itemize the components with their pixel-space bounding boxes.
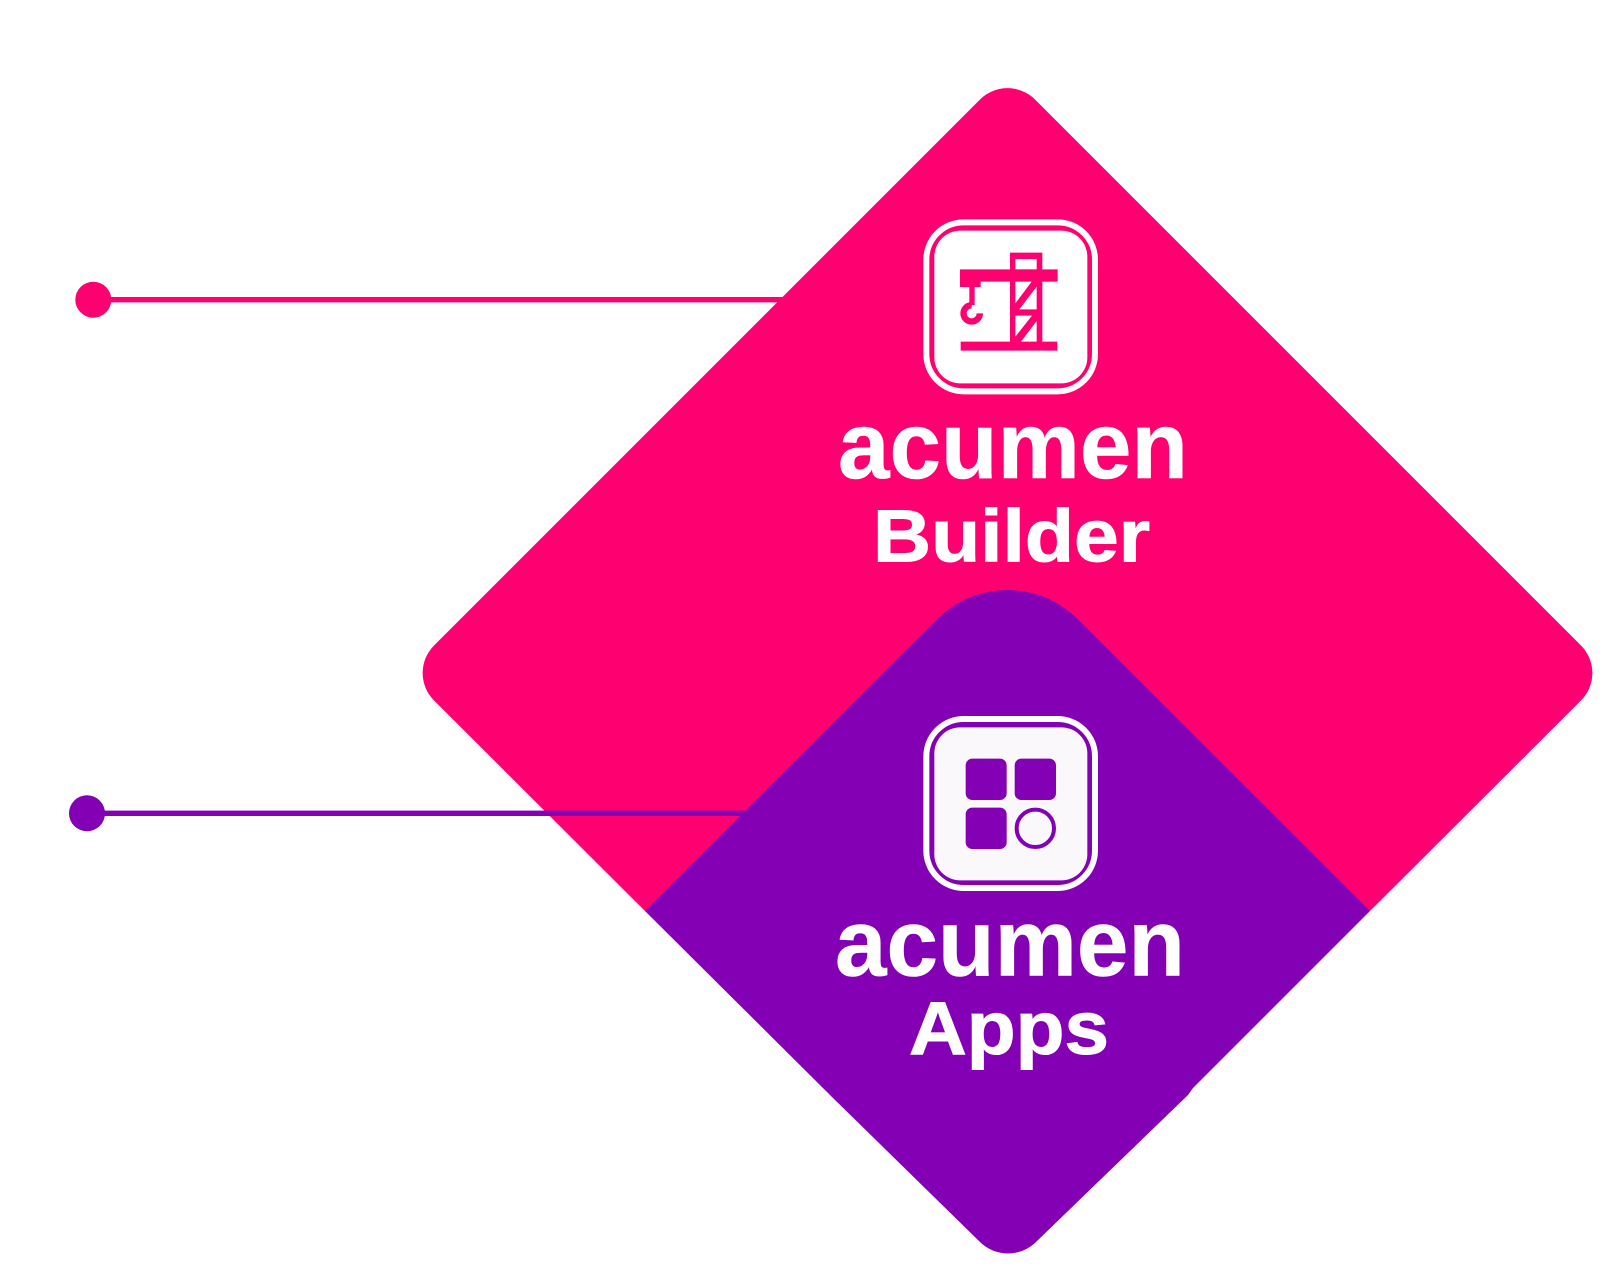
heading: Apps: Apps: [909, 986, 1109, 1070]
panel: pink diamond: [423, 88, 1592, 911]
logo text: acumen: acumen: [835, 891, 1185, 997]
connector: purple dot and line: [69, 795, 749, 831]
connector: pink dot and line: [75, 282, 788, 318]
heading: Builder: Builder: [873, 495, 1150, 578]
panel: purple rounded shape: [645, 590, 1370, 1253]
logo text: acumen: acumen: [838, 393, 1188, 499]
icon: builder crane badge: [926, 222, 1095, 391]
icon: apps grid badge: [926, 719, 1095, 888]
